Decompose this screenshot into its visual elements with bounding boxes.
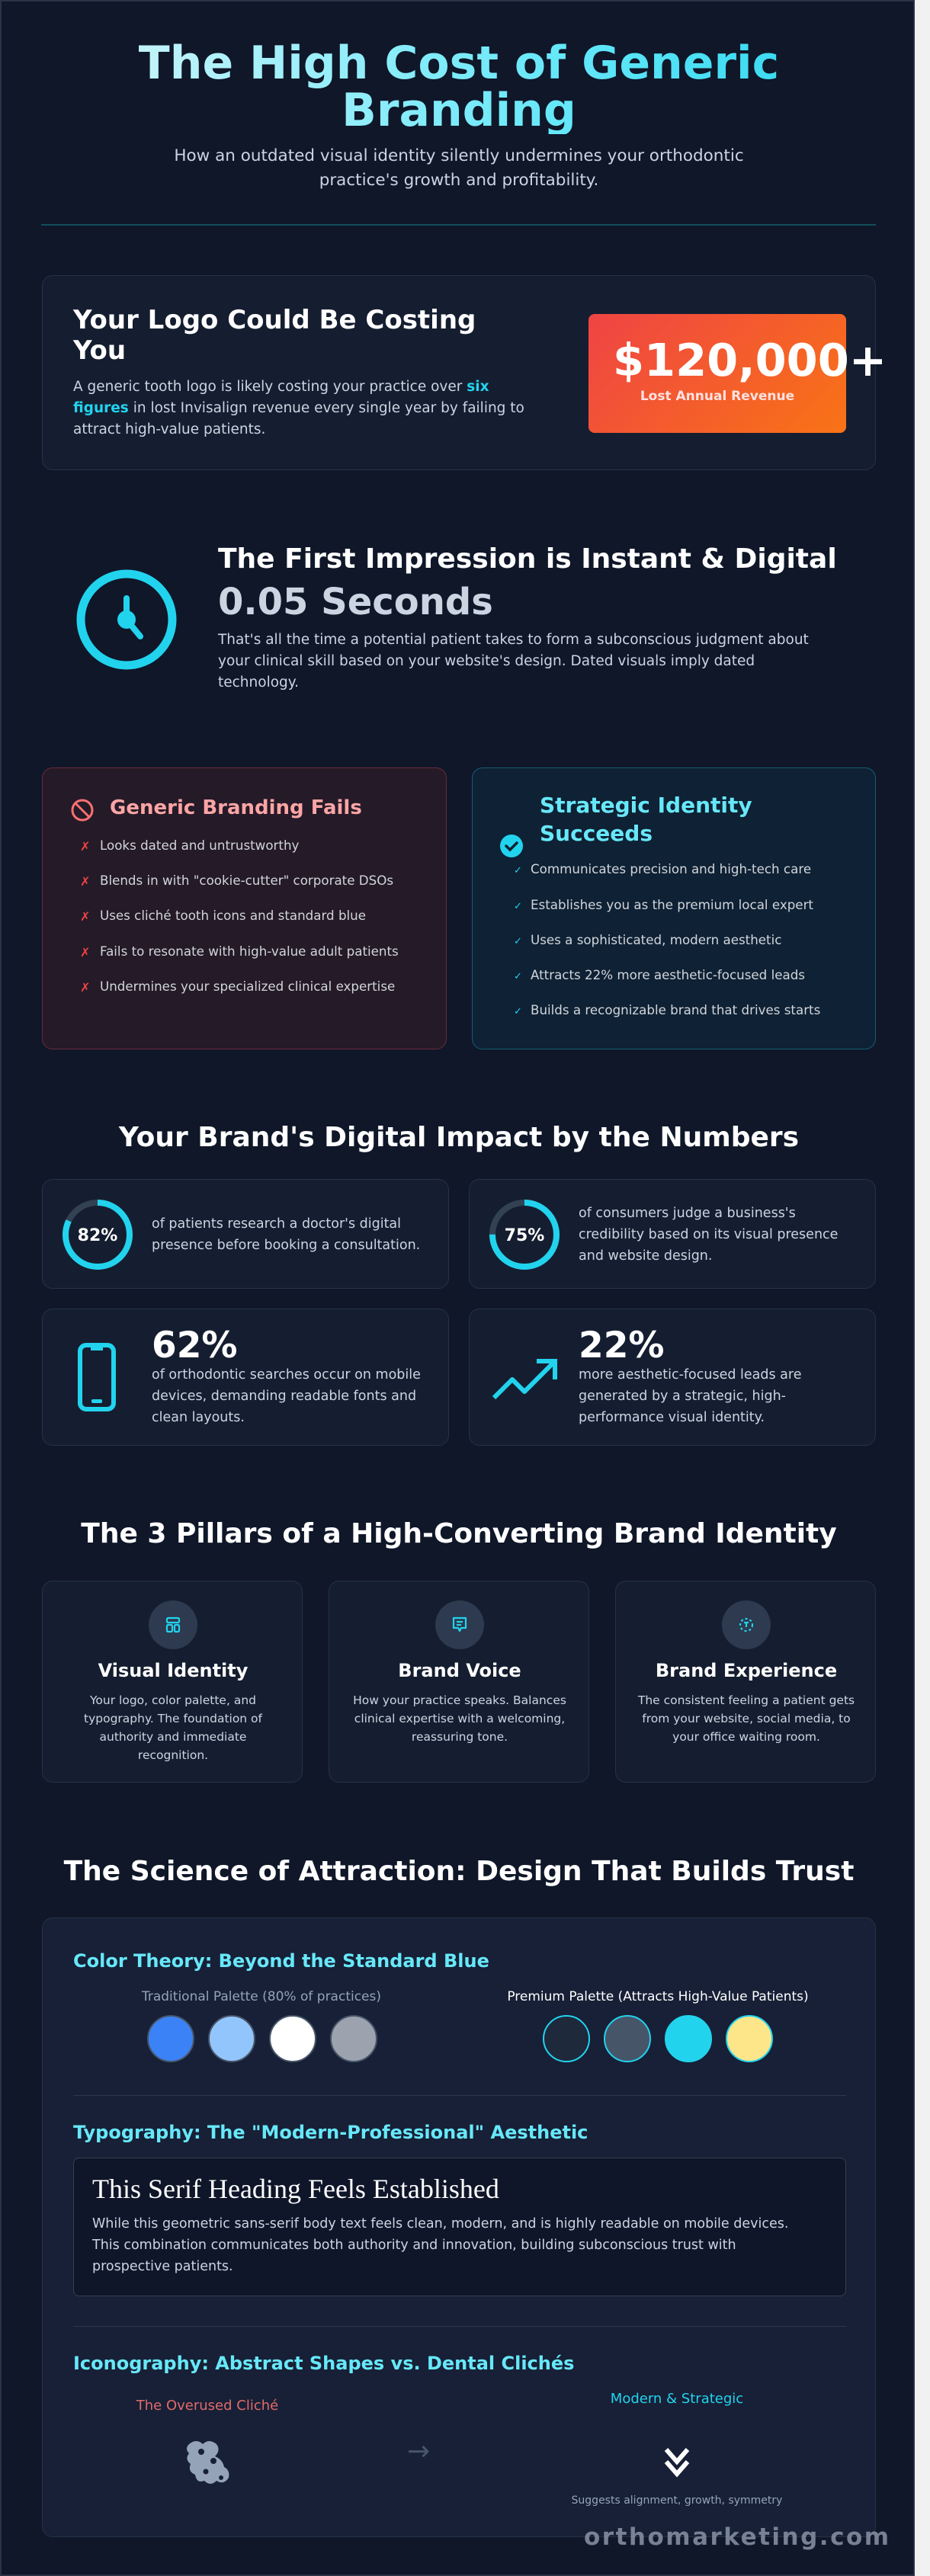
stat: 22: 22% bbox=[579, 1325, 665, 1366]
list: succeeds bbox=[514, 861, 820, 1017]
icon: layout bbox=[149, 1600, 197, 1649]
stat card: 22% bbox=[469, 1309, 876, 1446]
heading: generic fails: Generic Branding Fails bbox=[110, 796, 362, 819]
list: succeeds: ✓ bbox=[514, 1006, 522, 1017]
heading: logo cost: Your Logo Could Be Costing You bbox=[73, 305, 476, 366]
list: fails: ✗ bbox=[80, 874, 90, 889]
panel: science bbox=[42, 1918, 876, 2537]
label: overused cliché: The Overused Cliché bbox=[136, 2398, 278, 2414]
heading: strategic succeeds bbox=[540, 793, 752, 846]
heading: strategic succeeds: Succeeds bbox=[540, 821, 653, 846]
callout: revenue bbox=[588, 314, 846, 433]
icon: cliché tooth bbox=[187, 2441, 229, 2484]
label: modern strategic: Modern & Strategic bbox=[611, 2391, 743, 2407]
text: visual identity: Your logo, color palette, and typography. The foundation of authority and immediate recognition. bbox=[84, 1693, 262, 1762]
list: succeeds: ✓ bbox=[514, 901, 522, 912]
icon: focus bbox=[722, 1600, 771, 1649]
chart: ring 82: 82% bbox=[78, 1226, 117, 1245]
panel: brand voice bbox=[329, 1581, 589, 1783]
chart: ring 82 bbox=[63, 1200, 133, 1270]
icon: prohibited bbox=[72, 799, 93, 822]
text: logo cost: A generic tooth logo is likely costing your practice over six figures in lost Invisalign revenue every single year by failing to attract high-value patients. bbox=[73, 379, 524, 437]
text: 22: more aesthetic-focused leads are generated by a strategic, high-performance visual identity. bbox=[579, 1367, 801, 1425]
icon: phone bbox=[78, 1343, 116, 1411]
subtitle: How an outdated visual identity silently undermines your orthodontic practice's growth and profitability. bbox=[174, 146, 744, 190]
stat: 0.05 seconds: 0.05 Seconds bbox=[218, 581, 493, 623]
caption: modern: Suggests alignment, growth, symmetry bbox=[572, 2494, 782, 2507]
callout: revenue: Lost Annual Revenue bbox=[640, 389, 794, 404]
list: fails: ✗ bbox=[80, 980, 90, 995]
stat card: 75% bbox=[469, 1179, 876, 1289]
heading: typography: Typography: The "Modern-Professional" Aesthetic bbox=[73, 2122, 588, 2143]
heading: digital impact: Your Brand's Digital Impact by the Numbers bbox=[119, 1122, 799, 1153]
palette: traditional bbox=[142, 1989, 381, 2062]
list: fails: Blends in with "cookie-cutter" corporate DSOs bbox=[100, 873, 393, 888]
palette: premium: Premium Palette (Attracts High-Value Patients) bbox=[507, 1989, 809, 2004]
list: succeeds: ✓ bbox=[514, 971, 522, 982]
heading: serif sample: This Serif Heading Feels Established bbox=[92, 2174, 499, 2204]
list: fails: ✗ bbox=[80, 945, 90, 960]
list: fails: Fails to resonate with high-value adult patients bbox=[100, 944, 399, 959]
watermark: orthomarketing.com bbox=[584, 2523, 891, 2551]
panel: brand experience bbox=[615, 1581, 876, 1783]
text: 75: of consumers judge a business's credibility based on its visual presence and website design. bbox=[579, 1206, 838, 1264]
title bbox=[2, 40, 916, 134]
list: fails: Looks dated and untrustworthy bbox=[100, 838, 299, 853]
heading: first impression: The First Impression is Instant & Digital bbox=[218, 543, 837, 575]
panel: typography sample bbox=[73, 2158, 846, 2296]
callout: revenue: $120,000+ bbox=[613, 334, 887, 386]
panel: logo cost bbox=[42, 275, 876, 470]
heading: strategic succeeds: Strategic Identity bbox=[540, 793, 752, 818]
icon: trend bbox=[492, 1359, 557, 1399]
title: The High Cost of Generic bbox=[139, 37, 779, 90]
heading: iconography: Iconography: Abstract Shapes vs. Dental Clichés bbox=[73, 2353, 574, 2374]
text: brand voice: How your practice speaks. Balances clinical expertise with a welcoming, reassuring tone. bbox=[353, 1693, 566, 1744]
list: fails bbox=[80, 838, 399, 995]
list: succeeds: Communicates precision and high-tech care bbox=[531, 861, 811, 876]
list: succeeds: Attracts 22% more aesthetic-focused leads bbox=[531, 967, 805, 982]
stat card: 62% bbox=[42, 1309, 449, 1446]
text: 62: of orthodontic searches occur on mobile devices, demanding readable fonts and clean layouts. bbox=[152, 1367, 421, 1425]
text: first impression: That's all the time a potential patient takes to form a subconscious judgment about your clinical skill based on your website's design. Dated visuals imply dated technology. bbox=[218, 632, 809, 690]
icon: check circle bbox=[500, 835, 523, 857]
stat: 62: 62% bbox=[152, 1325, 238, 1366]
list: fails: ✗ bbox=[80, 909, 90, 924]
chart: ring 75 bbox=[489, 1200, 560, 1270]
list: succeeds: ✓ bbox=[514, 936, 522, 947]
heading: color theory: Color Theory: Beyond the Standard Blue bbox=[73, 1950, 489, 1972]
heading: brand voice: Brand Voice bbox=[398, 1660, 521, 1681]
list: succeeds: Uses a sophisticated, modern aesthetic bbox=[531, 932, 781, 947]
chart: ring 75: 75% bbox=[505, 1226, 544, 1245]
list: succeeds: Builds a recognizable brand that drives starts bbox=[531, 1002, 820, 1017]
list: fails: Uses cliché tooth icons and standard blue bbox=[100, 908, 366, 923]
panel: strategic succeeds bbox=[472, 767, 876, 1049]
stat card: 82% bbox=[42, 1179, 449, 1289]
list: fails: Undermines your specialized clinical expertise bbox=[100, 979, 395, 994]
title: Branding bbox=[342, 84, 576, 137]
text: brand experience: The consistent feeling a patient gets from your website, social media, to your office waiting room. bbox=[638, 1693, 855, 1744]
icon: message bbox=[435, 1600, 484, 1649]
heading: science: The Science of Attraction: Design That Builds Trust bbox=[64, 1856, 854, 1887]
arrow: → bbox=[407, 2436, 430, 2467]
list: succeeds: Establishes you as the premium local expert bbox=[531, 897, 813, 912]
heading: pillars: The 3 Pillars of a High-Converting Brand Identity bbox=[81, 1518, 837, 1549]
panel: visual identity bbox=[42, 1581, 303, 1783]
text: sans sample: While this geometric sans-serif body text feels clean, modern, and is highly readable on mobile devices. This combination communicates both authority and innovation, building subconscious trust with prospective patients. bbox=[92, 2216, 788, 2274]
list: fails: ✗ bbox=[80, 839, 90, 854]
heading: brand experience: Brand Experience bbox=[656, 1660, 837, 1681]
heading: visual identity: Visual Identity bbox=[98, 1660, 248, 1681]
icon: clock bbox=[76, 570, 177, 669]
palette: traditional: Traditional Palette (80% of practices) bbox=[142, 1989, 381, 2004]
list: succeeds: ✓ bbox=[514, 865, 522, 876]
icon: chevrons bbox=[665, 2448, 689, 2477]
palette: premium bbox=[507, 1989, 809, 2062]
panel: generic fails bbox=[42, 767, 447, 1049]
text: 82: of patients research a doctor's digital presence before booking a consultation. bbox=[152, 1216, 420, 1253]
